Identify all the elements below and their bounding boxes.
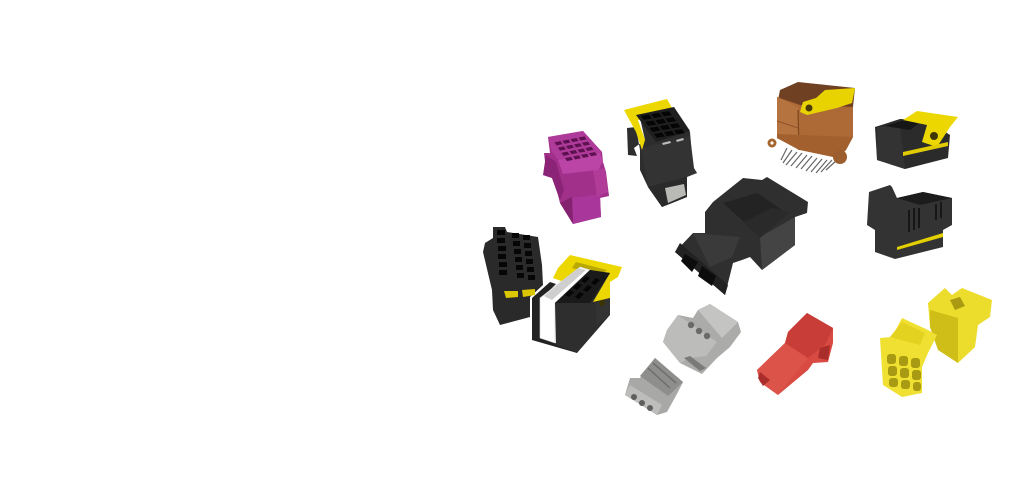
connector: black with yellow latch, top centre	[624, 99, 697, 207]
connector: black with yellow tabs, left	[483, 227, 543, 325]
connector: black with yellow latch, top right	[875, 111, 958, 169]
yellow latch	[800, 88, 855, 115]
connector: grey large	[663, 304, 741, 374]
connector: magenta	[543, 131, 609, 224]
connector: large black plug, centre	[675, 177, 808, 295]
connector: red	[757, 313, 833, 395]
connector: grey small	[625, 358, 683, 415]
connector: yellow 9-way, front	[880, 318, 937, 397]
connector: yellow housing, back	[928, 288, 992, 363]
connector: black and white with yellow frame	[532, 255, 622, 353]
connector: brown with yellow latch and pins	[768, 82, 855, 173]
connector: black open housing, middle right	[867, 185, 952, 259]
pins	[781, 148, 837, 173]
